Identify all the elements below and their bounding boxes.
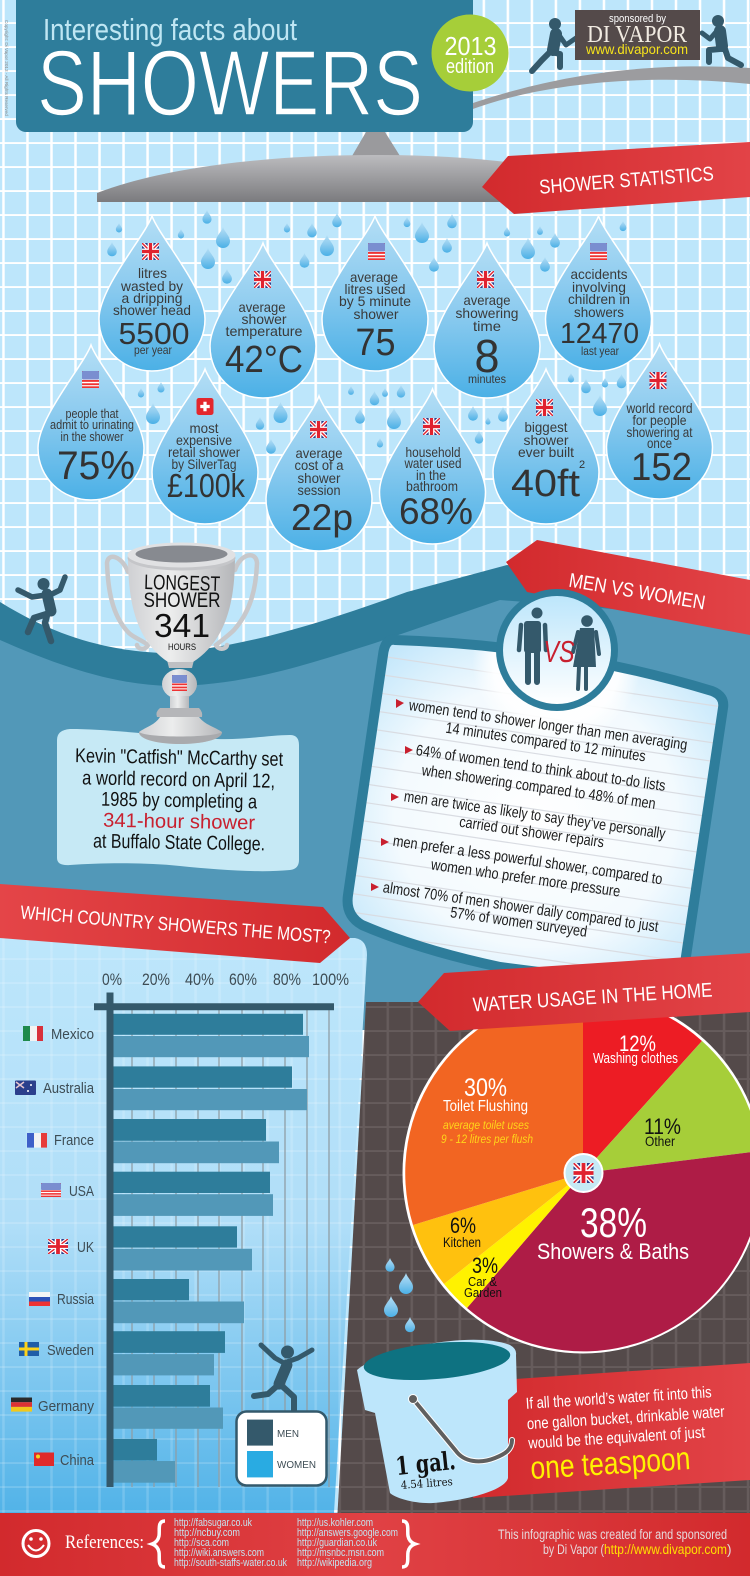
country labels and flags: Mexico [51,1026,94,1043]
drop: most expensive shower [152,369,258,524]
axis labels: 20% [142,970,170,989]
axis labels [102,970,349,989]
trophy text: LONGEST [144,571,221,596]
banner: shower statistics [482,142,750,214]
figure pushing right [702,15,741,65]
panel: men vs women facts [342,635,728,970]
trophy cup [128,556,235,662]
references heading: References: [65,1532,144,1553]
banner: which country [0,884,350,963]
drop: shower temperature [210,243,316,398]
drop: showering time: minutes [468,372,506,386]
drop: household water [380,389,486,544]
banner: which country: WHICH COUNTRY SHOWERS THE MOST? [20,903,331,948]
bucket label: 1 gal. [394,1446,457,1481]
drop: shower temperature: temperature [226,323,303,339]
sponsor credit: ) [727,1542,732,1557]
men vs women fact list: women who prefer more pressure [429,856,621,901]
reference links column two: http://guardian.co.uk [297,1537,377,1549]
drop: showering time: time [473,318,501,334]
men vs women fact list: women tend to shower longer than men averaging [407,697,688,754]
pie labels: 6% [450,1213,476,1238]
drop: most expensive shower: expensive [176,432,232,448]
trophy handles [107,555,257,649]
axis labels: 0% [102,970,122,989]
banner: shower statistics: SHOWER STATISTICS [538,163,715,199]
drop: cost of a shower session: shower [298,470,341,486]
sponsor credit [498,1527,732,1557]
text box: Kevin Catfish McCarthy record: 1985 by completing a [101,789,258,813]
men vs women fact list: when showering compared to 48% of men [420,762,657,813]
header panel [16,0,473,135]
drop: world record people showering: 152 [631,446,692,489]
drop: litres wasted [99,216,205,371]
drop: world record people showering: showering at [626,424,693,440]
bullet markers [371,699,413,891]
pie labels: 11% [644,1114,681,1139]
country labels and flags: Australia [43,1080,95,1097]
drop: showering time: 8 [474,330,500,382]
drop: biggest shower: 2 [579,459,585,471]
reference links column two: http://us.kohler.com [297,1517,373,1529]
drop: urinating [38,345,144,500]
reference links column two: http://msnbc.msn.com [297,1547,384,1559]
drop: world record people showering: world record [626,400,692,416]
axis labels: 60% [229,970,257,989]
drop: biggest shower [493,369,599,524]
footer: references [0,1513,750,1576]
pie labels: 9 - 12 litres per flush [441,1132,533,1146]
drop: most expensive shower: retail shower [168,444,240,460]
pie labels: Showers & Baths [537,1239,689,1264]
drop: urinating: people that [66,407,119,421]
drop: cost of a shower session: cost of a [294,457,344,473]
drop: litres wasted: per year [134,343,172,357]
text box: Kevin Catfish McCarthy record: Kevin "Catfish" McCarthy set [75,745,284,771]
men vs women fact list [382,697,688,941]
drop: showering time [434,243,540,398]
drop: accidents [546,216,652,371]
grid lines [132,1010,329,1487]
icon: smiley [23,1530,49,1556]
drop: most expensive shower: by SilverTag [172,456,236,472]
drop: litres per 5 minute shower [322,216,428,371]
trophy: longest shower: HOURS [168,642,196,652]
woman figure [573,615,599,689]
country labels and flags: Sweden [47,1342,94,1359]
men vs women fact list: 57% of women surveyed [449,904,588,941]
drop: litres wasted: shower head [113,302,191,318]
shower pipe arc [470,66,750,110]
drop: accidents: involving [572,279,626,295]
man figure [519,608,546,682]
banner: one teaspoon fact: If all the world’s water fit into this [525,1384,712,1413]
reference links column one: http://sca.com [174,1537,229,1549]
reference links column one [174,1517,287,1569]
icon: one gallon bucket: 4.54 litres [400,1475,453,1492]
left brace [152,1521,165,1567]
pie labels: 30% [464,1074,507,1102]
drop: accidents: showers [574,304,624,320]
pie labels [441,1031,689,1300]
badge: 2013 edition: 2013 [444,31,496,61]
falling small water drops [107,210,626,454]
icon: UK flag hub [564,1154,602,1192]
water drops above bucket [384,1258,415,1332]
reference links column one: http://south-staffs-water.co.uk [174,1557,287,1569]
drop: world record people showering: for people [632,412,687,428]
pie labels: Kitchen [443,1234,481,1250]
sponsor credit: by Di Vapor ( [543,1542,604,1557]
drop: litres per 5 minute shower: litres used [344,281,406,297]
bars [113,1014,309,1483]
banner: one teaspoon fact: would be the equivalent of just [527,1424,706,1453]
drop: urinating: in the shower [60,430,124,444]
drop: cost of a shower session: average [296,445,343,461]
text box: Kevin Catfish McCarthy record: at Buffalo State College. [93,831,265,856]
reference links column one: http://ncbuy.com [174,1527,240,1539]
icon: man vs woman circle [496,589,618,711]
pie labels: 3% [472,1253,498,1278]
pie labels: Other [645,1133,675,1149]
pie labels: average toilet uses [443,1118,529,1132]
text box: Kevin Catfish McCarthy record: a world record on April 12, [82,767,275,793]
icon: falling figure [18,577,65,641]
drop: household water: household [406,444,460,460]
shower head [97,132,530,202]
text box: Kevin Catfish McCarthy record: 341-hour shower [103,810,256,834]
drop: litres per 5 minute shower: 75 [356,322,396,364]
copyright note: Copyright: Di Vapor 2013 - All Rights Reserved [4,20,9,116]
legend: MEN [277,1429,299,1440]
drop: shower temperature: 42°C [225,339,303,381]
drop: biggest shower: ever built [518,444,574,460]
bucket handle [408,1394,512,1461]
trophy: longest shower: 341 [154,607,210,644]
badge: 2013 edition: edition [446,56,494,78]
drop: accidents: 12470 [560,318,639,350]
drop: urinating: 75% [57,444,135,488]
country labels and flags: Germany [38,1398,94,1415]
reference links column two [297,1517,398,1569]
drop: most expensive shower: £100k [167,467,245,504]
drop: cost of a shower session [266,396,372,551]
sponsor: Di Vapor: sponsored by [609,13,666,25]
drop: household water: 68% [399,491,473,532]
drop: accidents: children in [568,291,630,307]
drop: household water: in the [416,467,446,483]
chart axes [94,992,334,1487]
country labels and flags: China [60,1452,95,1469]
men vs women fact list: almost 70% of men shower daily compared to just [382,879,660,936]
axis labels: 80% [273,970,301,989]
drop: biggest shower: biggest [524,419,568,435]
panel: which country showers the most [0,884,367,1513]
men vs women fact list: men are twice as likely to say they’ve personally [403,788,667,843]
axis labels: 100% [312,970,349,989]
legend [236,1412,326,1486]
brown tiled floor [334,1002,750,1576]
pie chart: water usage [402,992,750,1354]
legend: WOMEN [277,1460,316,1471]
pie labels: Washing clothes [593,1050,678,1067]
title: SHOWERS [37,31,423,135]
icon: man vs woman circle: VS [544,634,575,669]
banner: water usage in the home: WATER USAGE IN THE HOME [472,979,713,1017]
pie labels: Garden [464,1285,502,1300]
banner: men vs women [506,540,750,635]
drop: most expensive shower: most [190,420,219,436]
men vs women fact list: men prefer a less powerful shower, compared to [392,833,663,888]
drop: litres wasted: a dripping [122,290,182,306]
drop: world record people showering: once [647,435,672,451]
drop: litres wasted: 5500 [118,316,190,351]
trophy base [167,660,194,668]
drop: household water: water used [404,455,462,471]
men vs women fact list: 64% of women tend to think about to-do lists [415,742,667,795]
drop: shower temperature: shower [242,311,287,327]
axis labels: 40% [185,970,214,989]
drop: litres wasted: litres [138,265,167,281]
country labels and flags: France [54,1132,94,1149]
reference links column one: http://wiki.answers.com [174,1547,264,1559]
country labels and flags: USA [69,1183,94,1200]
country labels and flags: Russia [57,1291,95,1308]
drop: litres per 5 minute shower: shower [354,306,399,322]
drop: household water: bathroom [406,478,458,494]
banner: one teaspoon fact: one teaspoon [529,1440,691,1486]
drop: biggest shower: 40ft [511,463,580,505]
sponsor: Di Vapor: DI VAPOR [587,22,687,48]
pie labels: Toilet Flushing [443,1098,528,1115]
men vs women fact list: 14 minutes compared to 12 minutes [444,720,647,765]
drop: accidents: last year [581,344,619,358]
country labels and flags [11,1026,95,1469]
reference links column two: http://wikipedia.org [297,1557,372,1569]
trophy: longest shower [107,542,257,744]
trophy: longest shower: SHOWER [144,589,220,612]
reference links column one: http://fabsugar.co.uk [174,1517,252,1529]
drop: cost of a shower session: 22p [291,497,353,538]
badge: 2013 edition [432,14,508,92]
drop: shower temperature: average [238,299,286,315]
country labels and flags: UK [77,1239,94,1256]
banner: water usage in the home [418,953,750,1031]
icon: one gallon bucket [357,1337,517,1503]
sponsor: Di Vapor: www.divapor.com [585,42,688,57]
drop: cost of a shower session: session [298,482,340,498]
sponsor: Di Vapor [532,10,741,71]
subtitle: Interesting facts about [43,12,297,47]
drop: litres wasted: wasted by [120,278,183,294]
drop: biggest shower: shower [524,432,569,448]
drop: showering time: average [464,292,511,308]
icon: jumping figure [254,1345,312,1414]
drop: litres per 5 minute shower: average [350,269,398,285]
drop: showering time: showering [456,305,518,321]
drop: litres per 5 minute shower: by 5 minute [339,293,411,309]
banner: men vs women: MEN VS WOMEN [567,570,707,614]
pie labels: 12% [619,1031,656,1056]
right brace [402,1521,415,1567]
pie labels: Car & [468,1274,497,1289]
sponsor credit: http://www.divapor.com [604,1542,727,1557]
dark wave band [0,565,750,700]
drop: urinating: admit to urinating [50,418,134,432]
pie labels: 38% [580,1199,647,1246]
reference links column two: http://answers.google.com [297,1527,398,1539]
banner: one teaspoon fact [473,1363,750,1498]
drop: accidents: accidents [570,266,628,282]
mid blue wave section [0,600,750,1030]
men vs women fact list: carried out shower repairs [458,814,605,851]
text box: Kevin Catfish McCarthy record [57,729,299,871]
drop: world record people showering [606,344,712,499]
figure pushing left [532,18,576,71]
